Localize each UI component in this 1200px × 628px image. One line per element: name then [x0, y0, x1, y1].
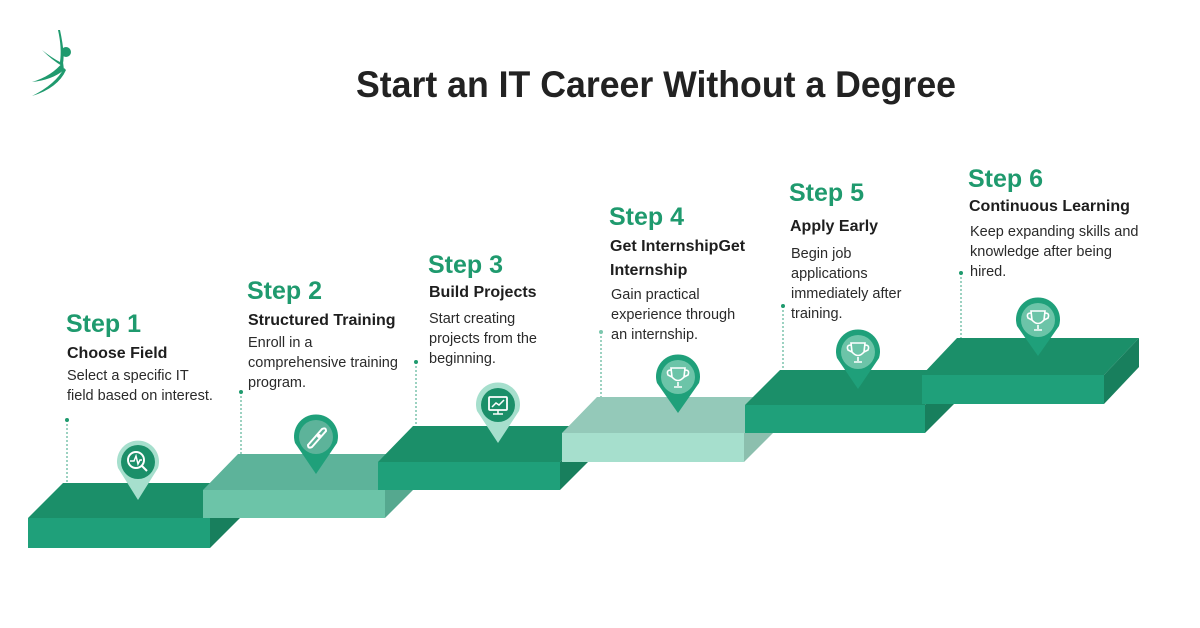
- text: step 2: Structured Training: [248, 312, 396, 329]
- text: step 2: [247, 277, 398, 391]
- step block 1: [28, 483, 245, 548]
- step block 2: [203, 454, 420, 518]
- text: step 5: [789, 179, 902, 322]
- text: step 4: experience through: [611, 307, 735, 323]
- text: step 1: Choose Field: [67, 345, 167, 362]
- pin 3: monitor icon: [476, 382, 520, 443]
- text: step 2: Step 2: [247, 277, 322, 305]
- text: step 5: immediately after: [791, 286, 902, 302]
- step block 4: [562, 397, 779, 462]
- pin 2: rocket icon: [294, 414, 338, 474]
- text: step 4: Internship: [610, 262, 688, 279]
- text: step 2: comprehensive training: [248, 355, 398, 371]
- text: step 3: beginning.: [429, 351, 496, 367]
- text: step 3: projects from the: [429, 331, 537, 347]
- text: step 6: hired.: [970, 264, 1006, 280]
- text: step 5: training.: [791, 306, 843, 322]
- text: step 5: applications: [791, 266, 868, 282]
- text: step 3: Build Projects: [429, 284, 537, 301]
- text: step 5: Begin job: [791, 246, 851, 262]
- text: step 6: Step 6: [968, 165, 1043, 193]
- text: step 6: Keep expanding skills and: [970, 224, 1138, 240]
- text: step 3: [428, 251, 537, 367]
- pin 1: analytics icon: [117, 441, 159, 500]
- text: step 5: Apply Early: [790, 218, 878, 235]
- text: step 4: Gain practical: [611, 287, 700, 303]
- text: step 1: Step 1: [66, 310, 141, 338]
- text: step 3: Start creating: [429, 311, 515, 327]
- step block 3: [378, 426, 595, 490]
- text: step 1: [66, 310, 213, 404]
- title: Start an IT Career Without a Degree: [356, 64, 956, 105]
- step block 6: [922, 338, 1139, 404]
- text: step 2: program.: [248, 375, 306, 391]
- pin 6: trophy icon: [1016, 297, 1060, 356]
- text: step 6: Continuous Learning: [969, 198, 1130, 215]
- text: step 6: [968, 165, 1138, 280]
- text: step 1: field based on interest.: [67, 388, 213, 404]
- text: step 1: Select a specific IT: [67, 368, 189, 384]
- step block 5: [745, 370, 960, 433]
- text: step 6: knowledge after being: [970, 244, 1112, 260]
- text: step 4: [609, 203, 746, 343]
- pin 5: trophy icon: [836, 329, 880, 389]
- text: step 3: Step 3: [428, 251, 503, 279]
- text: step 4: an internship.: [611, 327, 698, 343]
- text: step 4: Step 4: [609, 203, 684, 231]
- text: step 4: Get InternshipGet: [610, 238, 746, 255]
- text: step 5: Step 5: [789, 179, 864, 207]
- logo: [32, 30, 71, 96]
- pin 4: trophy icon: [656, 354, 700, 413]
- dotted connector lines: [65, 271, 963, 500]
- text: step 2: Enroll in a: [248, 335, 313, 351]
